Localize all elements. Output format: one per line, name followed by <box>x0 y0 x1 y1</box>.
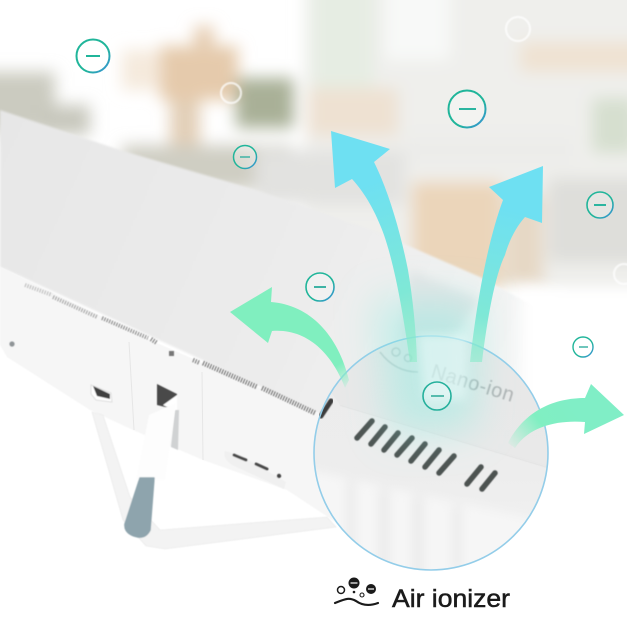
monitor back body <box>0 110 627 540</box>
enlarged vent slots <box>357 421 495 489</box>
negative ion: upper middle <box>234 146 256 168</box>
monitor stand <box>92 403 336 549</box>
arrow: upward right <box>470 166 543 362</box>
rear vents row <box>25 285 315 413</box>
ion airflow glow <box>375 300 480 435</box>
negative ion: right <box>587 192 613 218</box>
arrow: left <box>230 287 349 388</box>
negative ion: top left <box>76 40 110 72</box>
right-hand fade to white <box>520 285 627 540</box>
label: air ionizer: Air ionizer <box>392 585 510 613</box>
seams <box>129 342 203 460</box>
negative ion: top centre right <box>448 90 486 128</box>
negative ion: lower right <box>573 337 593 357</box>
arrow: right <box>508 384 624 448</box>
central light column <box>418 335 468 400</box>
icon: air ionizer <box>335 578 378 605</box>
negative ion: above left arrow <box>306 273 334 301</box>
upper surface edge <box>340 405 547 467</box>
nano-ion label: Nano-ion <box>429 361 517 407</box>
negative ion: inside circle <box>423 382 451 410</box>
stand rubber foot <box>125 478 154 537</box>
zoom circle: vent detail <box>313 335 549 571</box>
brand mark on monitor <box>380 348 418 372</box>
monitor ports <box>9 341 286 489</box>
ghost bubbles <box>221 17 627 284</box>
small slot at circle edge <box>321 401 331 416</box>
lower ribbed area <box>319 480 368 492</box>
arrow: upward left <box>331 131 417 362</box>
